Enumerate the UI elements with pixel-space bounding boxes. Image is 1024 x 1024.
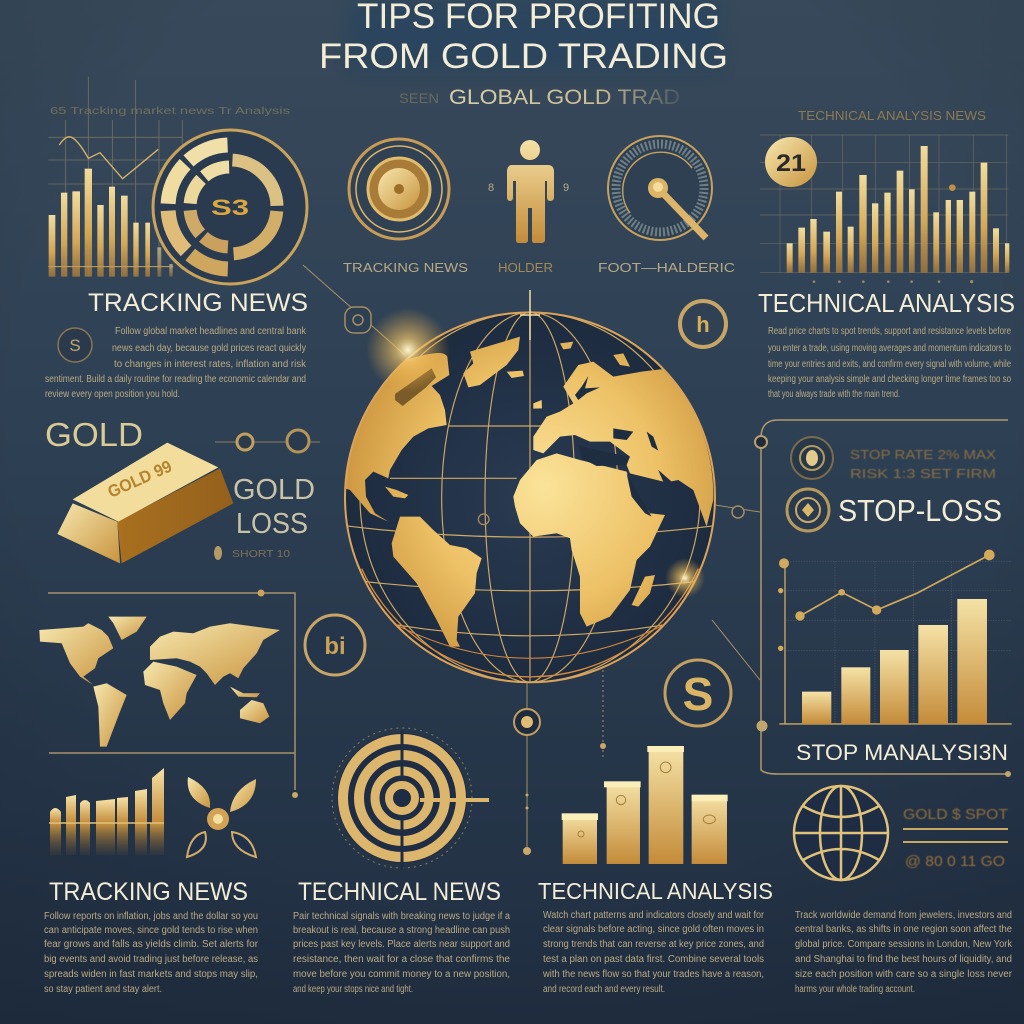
connector lines (303, 265, 760, 850)
body text: news each day, because gold prices react quickly (112, 343, 306, 354)
panel: stop-loss right (732, 420, 1012, 777)
body text: strong trends that can reverse at key price zones, and (543, 939, 764, 950)
body text (44, 911, 259, 995)
body text: central banks, as shifts in one region soon affect the (795, 924, 1012, 935)
gold bar (57, 443, 233, 563)
body text: breakout is real, because a strong headline can push (293, 925, 510, 936)
number badge (765, 137, 817, 187)
panel: top centre icons (343, 136, 735, 275)
gauge icon (142, 119, 318, 295)
body text: size each position with care so a single loss never (795, 969, 1013, 980)
target dial icon (349, 139, 449, 239)
chart caption: TECHNICAL ANALYSIS NEWS (798, 108, 986, 123)
small markers: 9 (563, 182, 569, 194)
body text: Follow reports on inflation, jobs and the dollar so you (44, 911, 258, 922)
body text: resistance, then wait for a close that confirms the (293, 954, 510, 965)
light flare: top left (366, 290, 540, 392)
globe (340, 312, 715, 683)
dollar coin icon: S (683, 668, 713, 720)
blurred data block: RISK 1:3 SET FIRM (850, 466, 996, 481)
title (319, 0, 728, 76)
icon labels: HOLDER (498, 260, 553, 275)
subtitle: GLOBAL GOLD TRAD (449, 86, 680, 109)
small markers (488, 182, 569, 194)
globe outline (345, 312, 715, 682)
body text: global price. Compare sessions in London, New York (795, 939, 1013, 950)
gauge icon: S3 (211, 195, 249, 220)
combo chart (778, 550, 1012, 724)
panel: gold bar (45, 416, 320, 563)
stop-loss icon (787, 489, 829, 531)
panel: tracking news bottom (44, 768, 259, 995)
panel: technical news bottom (293, 728, 510, 995)
small coin icon (58, 328, 92, 362)
bar chart (760, 135, 1009, 283)
number badge: 21 (776, 150, 806, 177)
body text (768, 326, 1011, 400)
body text: fear grows and falls as yields climb. Set alerts for (44, 939, 259, 950)
globe small marker (478, 514, 489, 525)
subtitle: SEEN (399, 90, 439, 106)
panel: technical analysis top right (758, 108, 1015, 400)
heading: STOP-LOSS (838, 493, 1002, 528)
heading: TECHNICAL ANALYSIS (538, 878, 773, 904)
icon labels: TRACKING NEWS (343, 260, 468, 275)
body text (293, 911, 510, 995)
node icon upper left of globe (345, 307, 371, 333)
coin icon upper right of globe (680, 301, 726, 347)
body text: so stay patient and stay alert. (44, 984, 162, 995)
seas and inland water (575, 376, 672, 517)
connector nodes (215, 430, 320, 452)
body text: Pair technical signals with breaking news to judge if a (293, 911, 510, 922)
body text: sentiment. Build a daily routine for reading the economic calendar and (45, 374, 306, 385)
continents (340, 337, 713, 647)
heading: TECHNICAL NEWS (298, 878, 501, 906)
globe disc (345, 312, 715, 682)
small caption (214, 546, 291, 560)
body text: with the news flow so that your trades have a reason, (542, 969, 764, 980)
heading: GOLD (45, 416, 143, 453)
chart caption: 65 Tracking market news Tr Analysis (50, 106, 290, 117)
body text: review every open position you hold. (45, 389, 180, 400)
body text: and Shanghai to find the best hours of liquidity, and (795, 954, 1012, 965)
title: FROM GOLD TRADING (319, 37, 728, 76)
gold loss label: LOSS (236, 508, 308, 540)
blurred data block: STOP RATE 2% MAX (850, 447, 996, 462)
heading: TRACKING NEWS (88, 289, 308, 317)
data rows (903, 806, 1008, 870)
small markers: 8 (488, 182, 494, 194)
dial icon with needle (608, 136, 712, 240)
panel: world map (39, 590, 295, 790)
gold loss label: GOLD (233, 474, 315, 506)
coin icon: centre left (305, 615, 365, 675)
globe grid (347, 312, 713, 683)
dollar coin icon (665, 660, 731, 726)
body text: that you always trade with the main trend. (768, 389, 900, 400)
world map (39, 617, 280, 747)
heading: TRACKING NEWS (49, 878, 248, 906)
body text: big events and avoid trading just before release, as (44, 954, 258, 965)
bar engraving: GOLD 99 (105, 457, 175, 502)
body text: test a plan on past data first. Combine several tools (543, 954, 764, 965)
globe icon (794, 786, 888, 880)
panel: tracking news top left (45, 77, 318, 400)
hudson shading (395, 368, 436, 406)
person icon (507, 140, 554, 243)
body text: move before you commit money to a new position, (293, 969, 510, 980)
body text (542, 910, 765, 995)
leaf emblem (187, 777, 256, 857)
map frame (48, 593, 295, 790)
small bar chart (49, 768, 164, 855)
body text: clear signals before acting, since gold often moves in (543, 924, 764, 935)
small coin icon: S (69, 336, 81, 355)
line beads (292, 743, 606, 855)
panel: bottom bars and S coin (514, 660, 773, 995)
target icon (332, 728, 489, 870)
coin icon (791, 437, 833, 479)
data rows: @ 80 0 11 GO (905, 853, 1005, 870)
chart title: STOP MANALYSI3N (796, 740, 1008, 765)
body text: to changes in interest rates, inflation and risk (114, 359, 307, 370)
body text: prices past key levels. Place alerts near support and (293, 939, 510, 950)
gold ingot bars (562, 746, 728, 864)
frame (761, 420, 1008, 774)
icon labels (343, 260, 735, 275)
body text: and keep your stops nice and tight. (293, 984, 413, 995)
body text: harms your whole trading account. (795, 984, 915, 995)
body text: Watch chart patterns and indicators closely and wait for (543, 910, 765, 921)
blurred data block (850, 447, 996, 481)
body text (45, 326, 307, 400)
small caption: SHORT 10 (232, 549, 291, 560)
coin icon upper right of globe: h (696, 312, 710, 337)
body text: Follow global market headlines and central bank (115, 326, 307, 337)
body text: can anticipate moves, since gold tends to rise when (44, 925, 258, 936)
panel: global outlook bottom right (794, 786, 1013, 995)
body text: and record each and every result. (543, 984, 665, 995)
target node (514, 709, 540, 735)
gold loss label (233, 474, 315, 540)
coin icon: centre left: bi (324, 633, 346, 660)
data rows: GOLD $ SPOT (903, 806, 1008, 823)
body text: spreads widen in fast markets and stops may slip, (44, 969, 258, 980)
body text (795, 910, 1013, 995)
frame nodes (732, 436, 1011, 777)
light flare: lower right (665, 558, 705, 598)
icon labels: FOOT—HALDERIC (598, 260, 735, 275)
map node (258, 590, 264, 596)
bar chart with line (48, 77, 182, 277)
